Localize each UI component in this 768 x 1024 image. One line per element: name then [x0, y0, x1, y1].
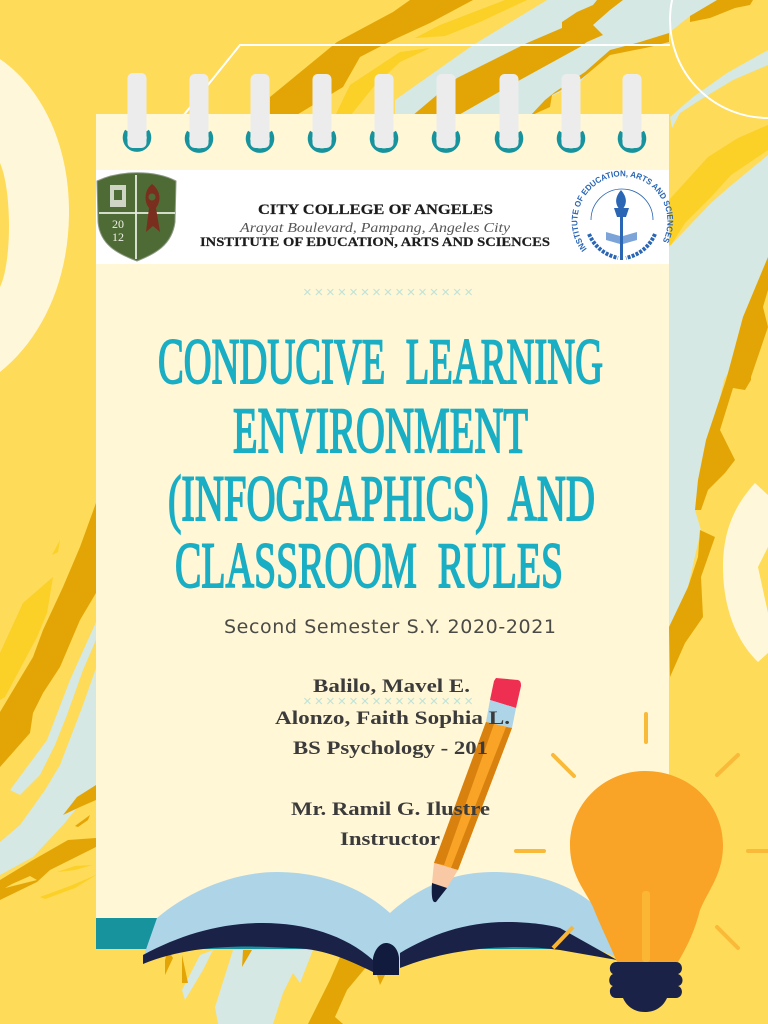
white outline circle and line — [183, 0, 768, 118]
bulb rays — [516, 714, 768, 948]
brush strokes: left — [0, 503, 96, 900]
cream ring: left — [0, 59, 69, 372]
teal bottom bar — [96, 918, 616, 949]
icon: light bulb — [516, 714, 768, 1012]
icon: pencil mark — [553, 927, 573, 948]
icon: pencil — [432, 678, 521, 902]
icon: college shield: 12 — [112, 230, 124, 244]
cream ring: right — [723, 483, 768, 662]
brush strokes: top — [270, 0, 768, 128]
header band — [96, 170, 669, 264]
authors and instructor: Mr. Ramil G. Ilustre — [291, 799, 490, 820]
icon: college shield: 20 — [112, 217, 124, 231]
decorative x row: middle: ××××××××××××××× — [303, 693, 473, 710]
address: Arayat Boulevard, Pampang, Angeles City — [239, 220, 510, 235]
authors and instructor — [275, 676, 510, 850]
subtitle: Second Semester S.Y. 2020-2021 — [224, 616, 556, 638]
panel: notepad — [96, 114, 669, 949]
icon: open book — [143, 872, 618, 975]
authors and instructor: Balilo, Mavel E. — [313, 676, 470, 697]
brush strokes: right — [669, 125, 768, 677]
authors and instructor: BS Psychology - 201 — [293, 738, 488, 759]
institute name: INSTITUTE OF EDUCATION, ARTS AND SCIENCES — [200, 235, 550, 249]
brush strokes: bottom — [165, 950, 385, 1024]
icon: college shield — [97, 173, 176, 261]
decorative x row: top: ××××××××××××××× — [303, 284, 473, 301]
school name: CITY COLLEGE OF ANGELES — [258, 202, 493, 218]
spiral binding — [125, 73, 644, 151]
title: ENVIRONMENT — [233, 395, 528, 467]
authors and instructor: Alonzo, Faith Sophia L. — [275, 708, 510, 729]
title — [158, 326, 603, 602]
icon: institute seal: INSTITUTE OF EDUCATION, ARTS AND SCIENCES — [572, 170, 674, 252]
authors and instructor: Instructor — [340, 829, 441, 850]
